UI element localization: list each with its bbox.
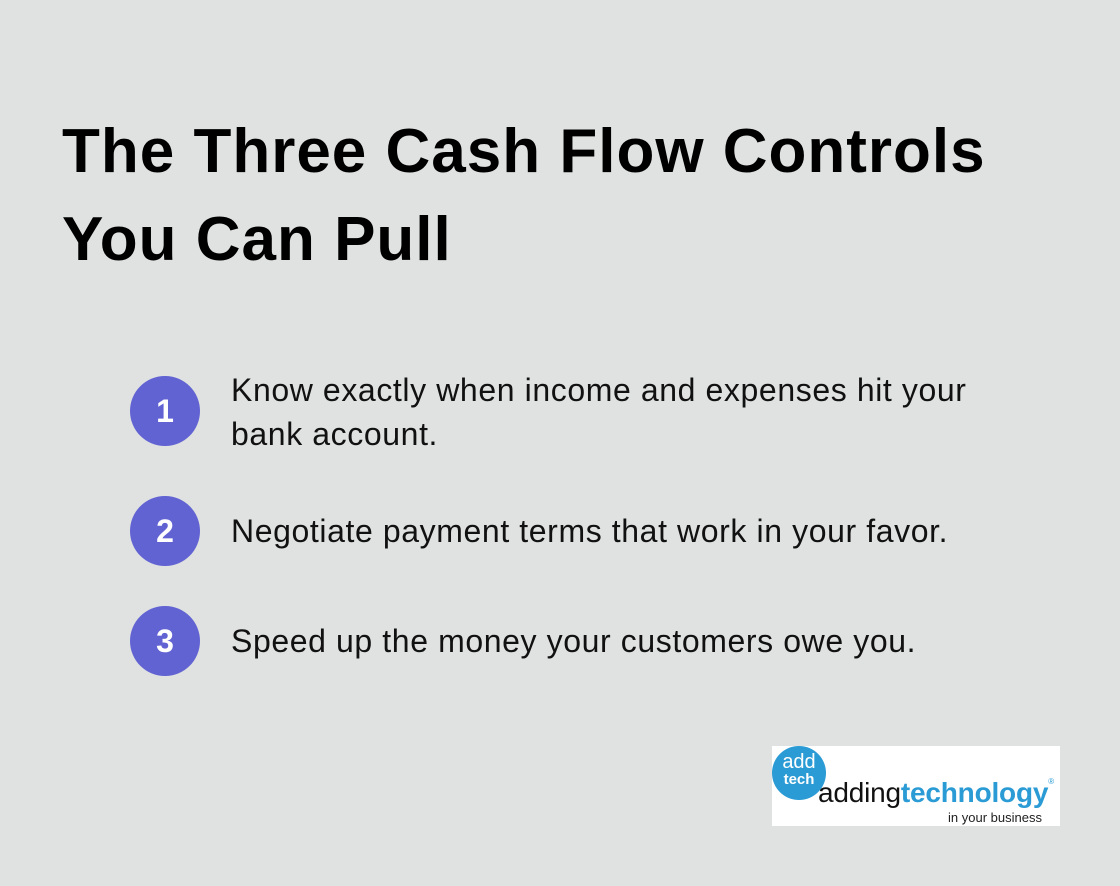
text 3: Speed up the money your customers owe you. [231,623,916,659]
number 2 [130,496,200,566]
step 2 [130,496,948,566]
logo circle: add [782,751,816,773]
step 3 [130,606,916,676]
logo circle [772,746,826,800]
logo [772,746,1060,826]
logo circle: tech [784,771,814,788]
title [62,117,986,274]
logo wordmark: addingtechnology® [818,777,1054,808]
text 1 [231,372,967,452]
title: The Three Cash Flow Controls [62,117,986,186]
title: You Can Pull [62,205,452,274]
logo tagline: in your business [948,810,1042,825]
number 3: 3 [156,623,174,659]
text 1: bank account. [231,416,438,452]
step 1 [130,372,967,452]
number 2: 2 [156,513,174,549]
number 1 [130,376,200,446]
number 1: 1 [156,393,174,429]
text 2: Negotiate payment terms that work in your favor. [231,513,948,549]
text 1: Know exactly when income and expenses hit your [231,372,967,408]
number 3 [130,606,200,676]
